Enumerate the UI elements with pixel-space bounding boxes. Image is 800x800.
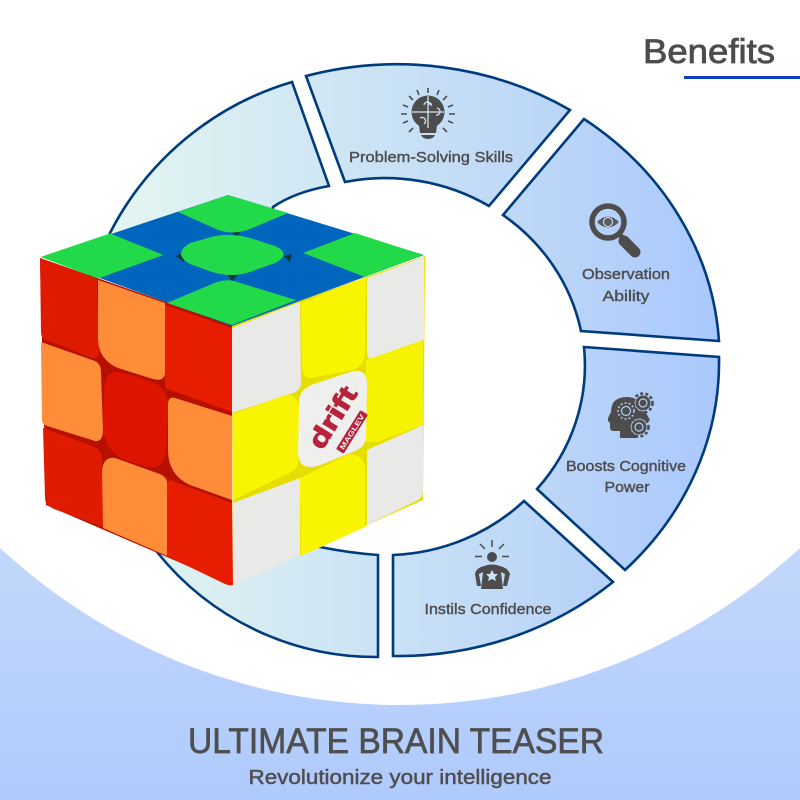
ring of benefit panels	[80, 64, 719, 657]
cube: body gaps left	[40, 258, 232, 585]
icon: light bulb with puzzle pieces	[401, 88, 455, 139]
icon: head with gears	[608, 394, 652, 438]
panel: instils confidence	[393, 501, 613, 656]
panel: observation ability	[503, 119, 719, 341]
cube: left face stickers	[40, 258, 233, 585]
label: observation ability: Observation	[582, 266, 670, 283]
panel: problem-solving skills	[306, 64, 570, 206]
heading underline	[684, 76, 800, 79]
panel: boosts cognitive power	[537, 347, 719, 570]
cube: body gaps right	[232, 256, 425, 585]
heading: benefits: Benefits	[643, 33, 775, 71]
3x3 cube	[40, 195, 425, 585]
background: blue bottom curve	[0, 540, 800, 800]
label: observation ability	[582, 266, 670, 305]
cube: drift maglev centre logo: MAGLEV	[339, 413, 367, 451]
cube: drift maglev centre logo: drift	[302, 380, 363, 454]
cube: top face	[42, 195, 424, 326]
panel: cube backdrop segment	[80, 82, 378, 657]
cube: drift maglev centre logo	[298, 371, 368, 467]
label: boosts cognitive power: Power	[604, 479, 650, 496]
cube: right face stickers	[232, 257, 424, 585]
label: problem-solving skills: Problem-Solving Skills	[349, 149, 513, 166]
icon: magnifier with eye	[592, 206, 635, 252]
subtitle: revolutionize your intelligence: Revolutionize your intelligence	[248, 766, 552, 789]
label: observation ability: Ability	[602, 288, 650, 305]
icon: confident person with star	[475, 540, 510, 589]
label: boosts cognitive power: Boosts Cognitive	[566, 458, 686, 475]
label: instils confidence: Instils Confidence	[424, 601, 552, 618]
title: ultimate brain teaser: ULTIMATE BRAIN TEASER	[188, 722, 604, 761]
label: boosts cognitive power	[566, 458, 686, 496]
